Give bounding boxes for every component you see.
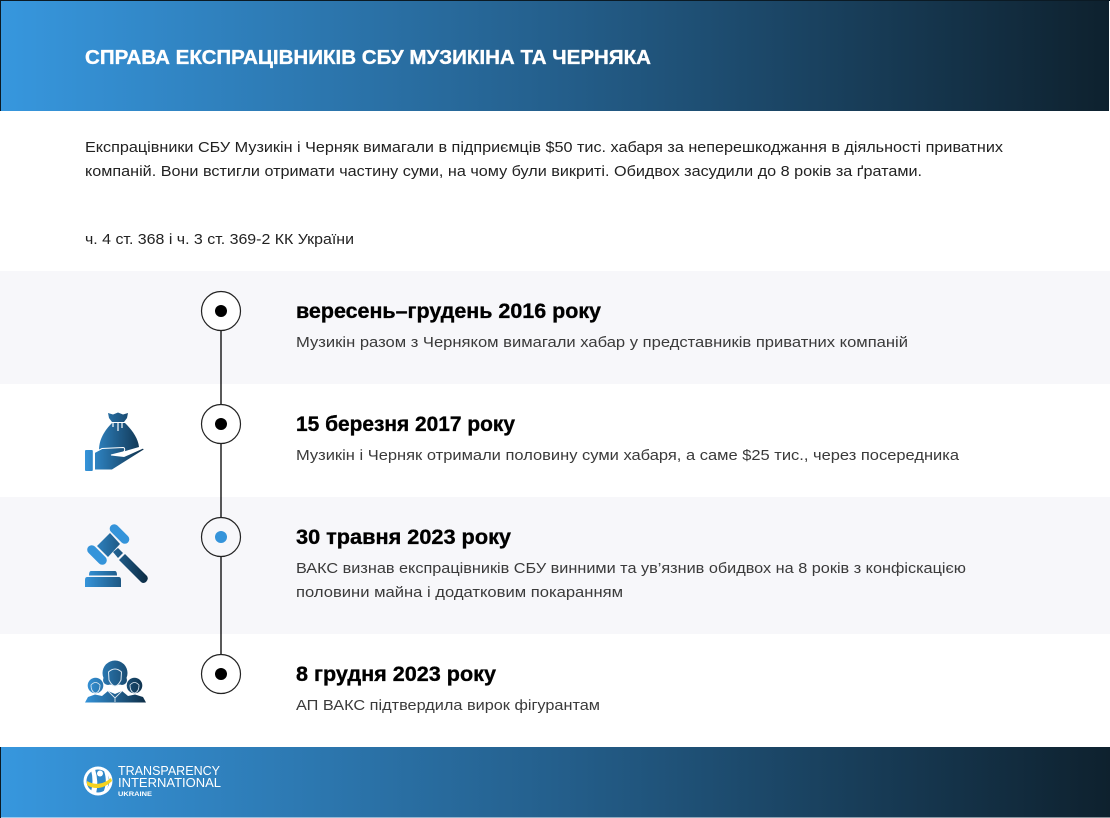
event 2 — [296, 413, 960, 464]
icon: money bag in hand — [85, 412, 144, 471]
icon: gavel — [85, 522, 148, 587]
intro text: Експрацівники СБУ Музикін і Черняк вимагали в підприємців $50 тис. хабаря за неперешкоджання в діяльності приватних — [85, 139, 1004, 156]
header banner — [0, 0, 1110, 111]
footer banner — [0, 747, 1110, 818]
intro text: компаній. Вони встигли отримати частину суми, на чому були викриті. Обидвох засудили до 8 років за ґратами. — [85, 163, 922, 180]
logo: Transparency International Ukraine: INTERNATIONAL — [118, 776, 221, 790]
icon: group of people — [85, 660, 146, 702]
timeline line — [220, 311, 222, 674]
event 3: ВАКС визнав експрацівників СБУ винними та ув’язнив обидвох на 8 років з конфіскацією — [296, 560, 966, 577]
row background: 30 May 2023 — [0, 497, 1110, 634]
event 4: 8 грудня 2023 року — [296, 663, 496, 686]
event 3: 30 травня 2023 року — [296, 526, 511, 549]
legal reference: ч. 4 ст. 368 і ч. 3 ст. 369-2 КК України — [85, 231, 354, 248]
title: СПРАВА ЕКСПРАЦІВНИКІВ СБУ МУЗИКІНА ТА ЧЕРНЯКА — [85, 47, 651, 69]
event 1: Музикін разом з Черняком вимагали хабар у представників приватних компаній — [296, 334, 908, 351]
timeline marker 1 — [202, 292, 240, 330]
timeline marker 4 — [202, 654, 240, 694]
timeline marker 3 — [202, 518, 240, 556]
event 3: половини майна і додатковим покаранням — [296, 584, 623, 601]
row background: September-December 2016 — [0, 271, 1110, 384]
event 4 — [296, 663, 600, 714]
logo: Transparency International Ukraine — [84, 764, 221, 798]
event 1 — [296, 300, 908, 351]
event 1: вересень–грудень 2016 року — [296, 300, 601, 323]
event 4: АП ВАКС підтвердила вирок фігурантам — [296, 697, 600, 714]
event 2: Музикін і Черняк отримали половину суми хабаря, а саме $25 тис., через посередника — [296, 447, 960, 464]
logo: Transparency International Ukraine: UKRAINE — [118, 791, 153, 798]
event 3 — [296, 526, 966, 601]
intro text — [85, 139, 1004, 180]
logo: Transparency International Ukraine: TRANSPARENCY — [118, 764, 221, 778]
timeline marker 2 — [202, 404, 240, 444]
event 2: 15 березня 2017 року — [296, 413, 515, 436]
